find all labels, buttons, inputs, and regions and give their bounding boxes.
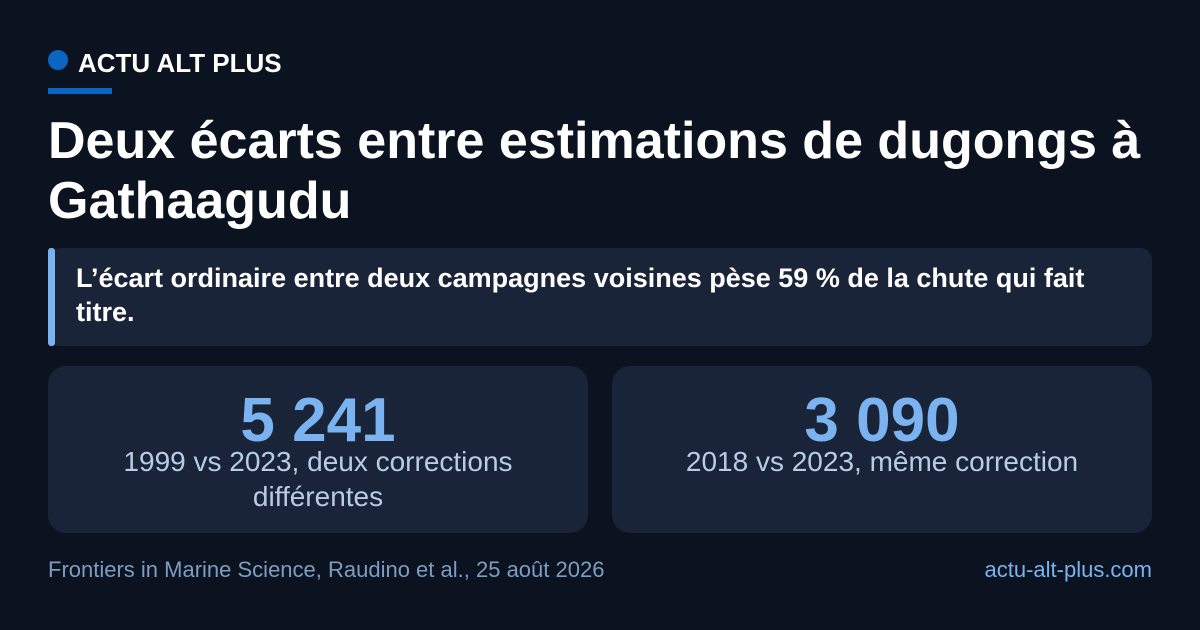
key message text: L’écart ordinaire entre deux campagnes voisines pèse 59 % de la chute qui fait [76,263,1084,293]
key message text [76,263,1084,327]
title [48,112,1140,230]
panel: stat 2018 vs 2023 [612,366,1152,533]
icon: brand dot [48,50,68,70]
title: Deux écarts entre estimations de dugongs à [48,112,1140,170]
stat value: 3 090 [804,386,960,455]
source: Frontiers in Marine Science, Raudino et al., 25 août 2026 [48,557,604,582]
stat label: 2018 vs 2023, même correction [686,446,1078,477]
panel: key message [48,248,1152,346]
site url: actu-alt-plus.com [984,557,1152,582]
title: Gathaagudu [48,172,351,230]
brand header [48,48,282,94]
brand underline [48,88,112,94]
stat value: 5 241 [240,386,396,455]
key message text: titre. [76,297,135,327]
accent bar [48,248,55,346]
brand name: ACTU ALT PLUS [78,48,282,78]
panel: stat 1999 vs 2023 [48,366,588,533]
stat label: 1999 vs 2023, deux corrections différentes [123,446,513,512]
